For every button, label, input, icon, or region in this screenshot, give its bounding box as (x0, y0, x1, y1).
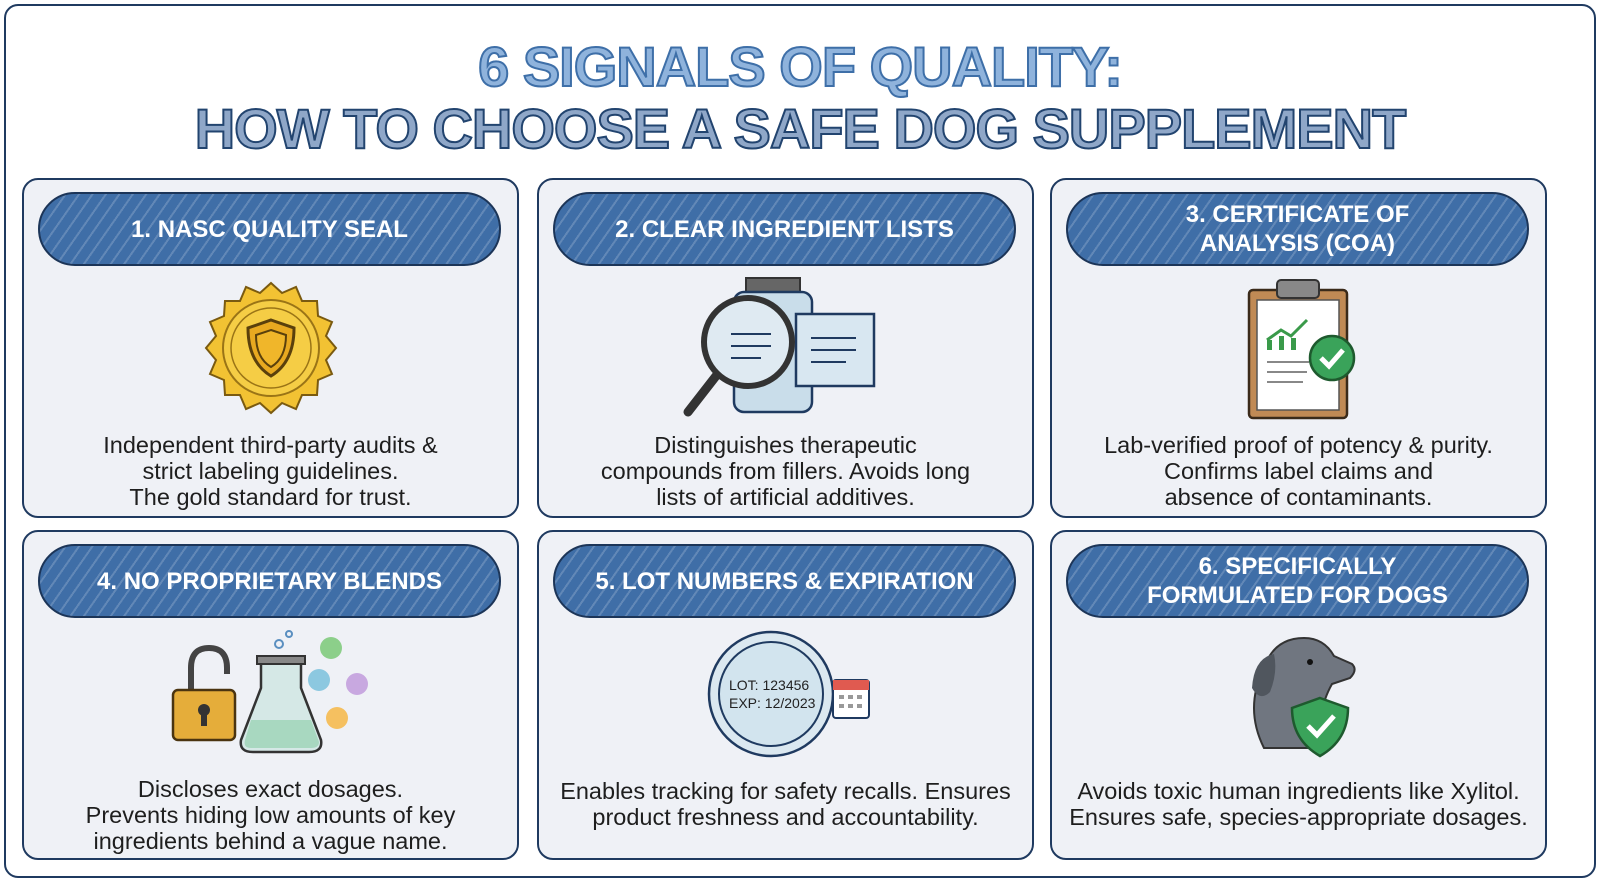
description (601, 432, 970, 510)
title (195, 35, 1407, 160)
heading: 5. LOT NUMBERS & EXPIRATION (595, 568, 974, 594)
heading: ANALYSIS (COA) (1200, 230, 1395, 257)
icon: magnifier over bottle and label (684, 277, 876, 416)
icon: lot label circle with calendar: EXP: 12/2023 (728, 695, 815, 711)
heading (1066, 192, 1529, 266)
panel: lot numbers & expiration (537, 530, 1034, 860)
description: Ensures safe, species-appropriate dosages. (1069, 804, 1528, 830)
heading: 6. SPECIFICALLY (1199, 553, 1396, 580)
heading (553, 544, 1016, 618)
heading: 2. CLEAR INGREDIENT LISTS (615, 216, 954, 242)
description: The gold standard for trust. (129, 484, 412, 510)
description: Prevents hiding low amounts of key (86, 802, 455, 828)
description: Lab-verified proof of potency & purity. (1104, 432, 1493, 458)
description (103, 432, 438, 510)
icon: gold seal with shield (204, 282, 338, 414)
panel: formulated for dogs (1050, 530, 1547, 860)
description (1104, 432, 1493, 510)
heading (1066, 544, 1529, 618)
description: Independent third-party audits & (103, 432, 438, 458)
description: strict labeling guidelines. (142, 458, 399, 484)
heading (38, 192, 501, 266)
heading (38, 544, 501, 618)
description (1069, 778, 1528, 830)
icon: lot label circle with calendar: LOT: 123456 (728, 677, 809, 693)
title line 1: 6 SIGNALS OF QUALITY: (478, 35, 1122, 98)
heading: 3. CERTIFICATE OF (1186, 201, 1409, 228)
description (560, 778, 1011, 830)
description: Confirms label claims and (1164, 458, 1433, 484)
panel: certificate of analysis (1050, 178, 1547, 518)
icon: lot label circle with calendar (708, 630, 870, 758)
heading: 1. NASC QUALITY SEAL (131, 216, 408, 242)
heading: 4. NO PROPRIETARY BLENDS (97, 568, 442, 594)
description: Enables tracking for safety recalls. Ensures (560, 778, 1011, 804)
description: Distinguishes therapeutic (654, 432, 917, 458)
panel: NASC quality seal (22, 178, 519, 518)
panel: clear ingredient lists (537, 178, 1034, 518)
description (86, 776, 456, 854)
description: lists of artificial additives. (656, 484, 915, 510)
description: absence of contaminants. (1165, 484, 1432, 510)
description: Avoids toxic human ingredients like Xylitol. (1077, 778, 1520, 804)
description: compounds from fillers. Avoids long (601, 458, 970, 484)
panel: no proprietary blends (22, 530, 519, 860)
title line 2: HOW TO CHOOSE A SAFE DOG SUPPLEMENT (195, 97, 1405, 160)
icon: unlocked padlock and flask (172, 630, 368, 754)
icon: dog head with shield (1252, 637, 1356, 758)
heading (553, 192, 1016, 266)
description: Discloses exact dosages. (138, 776, 403, 802)
description: product freshness and accountability. (592, 804, 979, 830)
icon: clipboard with check (1248, 279, 1356, 420)
description: ingredients behind a vague name. (93, 828, 448, 854)
heading: FORMULATED FOR DOGS (1147, 582, 1448, 609)
